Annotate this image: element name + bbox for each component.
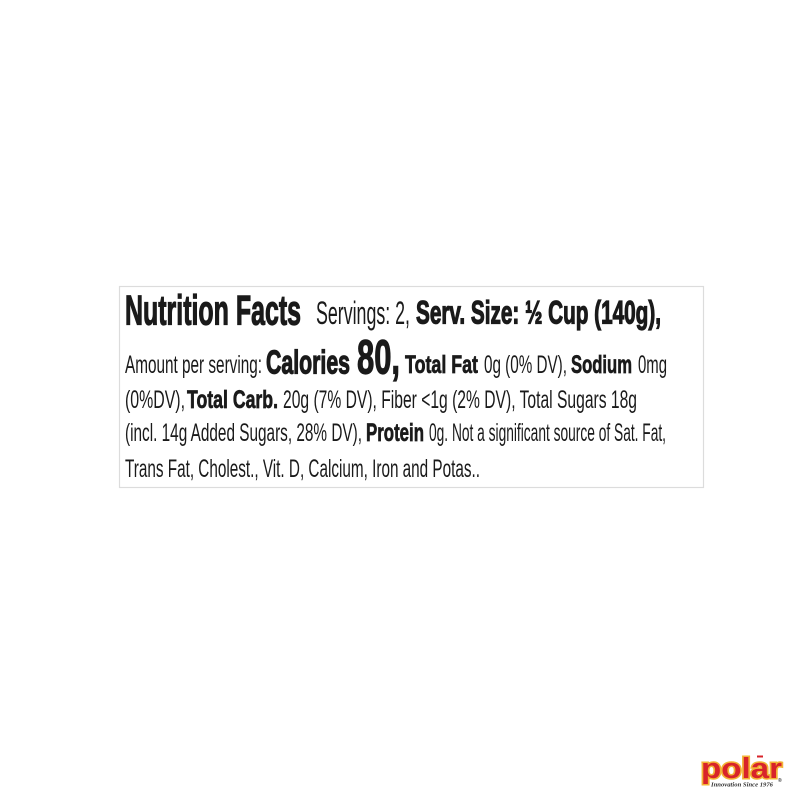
- text: insignificant nutrients: Trans Fat, Cholest., Vit. D, Calcium, Iron and Potas..: [125, 455, 480, 483]
- text: total fat label: Total Fat: [405, 351, 478, 379]
- logo registered mark: ®: [778, 777, 782, 784]
- text: sodium daily value: (0%DV),: [125, 386, 185, 414]
- text: calories value: 80,: [357, 332, 400, 384]
- text: serving size: Serv. Size: ½ Cup (140g),: [416, 294, 661, 330]
- text: added sugars: (incl. 14g Added Sugars, 28% DV),: [125, 419, 362, 447]
- text: servings: Servings: 2,: [316, 295, 410, 331]
- text: sodium label: Sodium: [571, 351, 632, 379]
- text: amount per serving: Amount per serving:: [125, 351, 262, 379]
- logo wordmark: polar: [701, 753, 782, 785]
- text: total fat value: 0g (0% DV),: [484, 351, 567, 379]
- text: total carb label: Total Carb.: [187, 386, 278, 414]
- logo umlaut mark: [757, 756, 763, 758]
- text: sodium value: 0mg: [638, 351, 667, 379]
- logo: polar: [701, 753, 782, 788]
- text: calories label: Calories: [266, 344, 350, 380]
- text: protein label: Protein: [366, 419, 424, 447]
- panel: nutrition facts box: [120, 286, 704, 488]
- heading: Nutrition Facts: Nutrition Facts: [125, 286, 301, 334]
- logo tagline: Innovation Since 1976: [710, 782, 773, 788]
